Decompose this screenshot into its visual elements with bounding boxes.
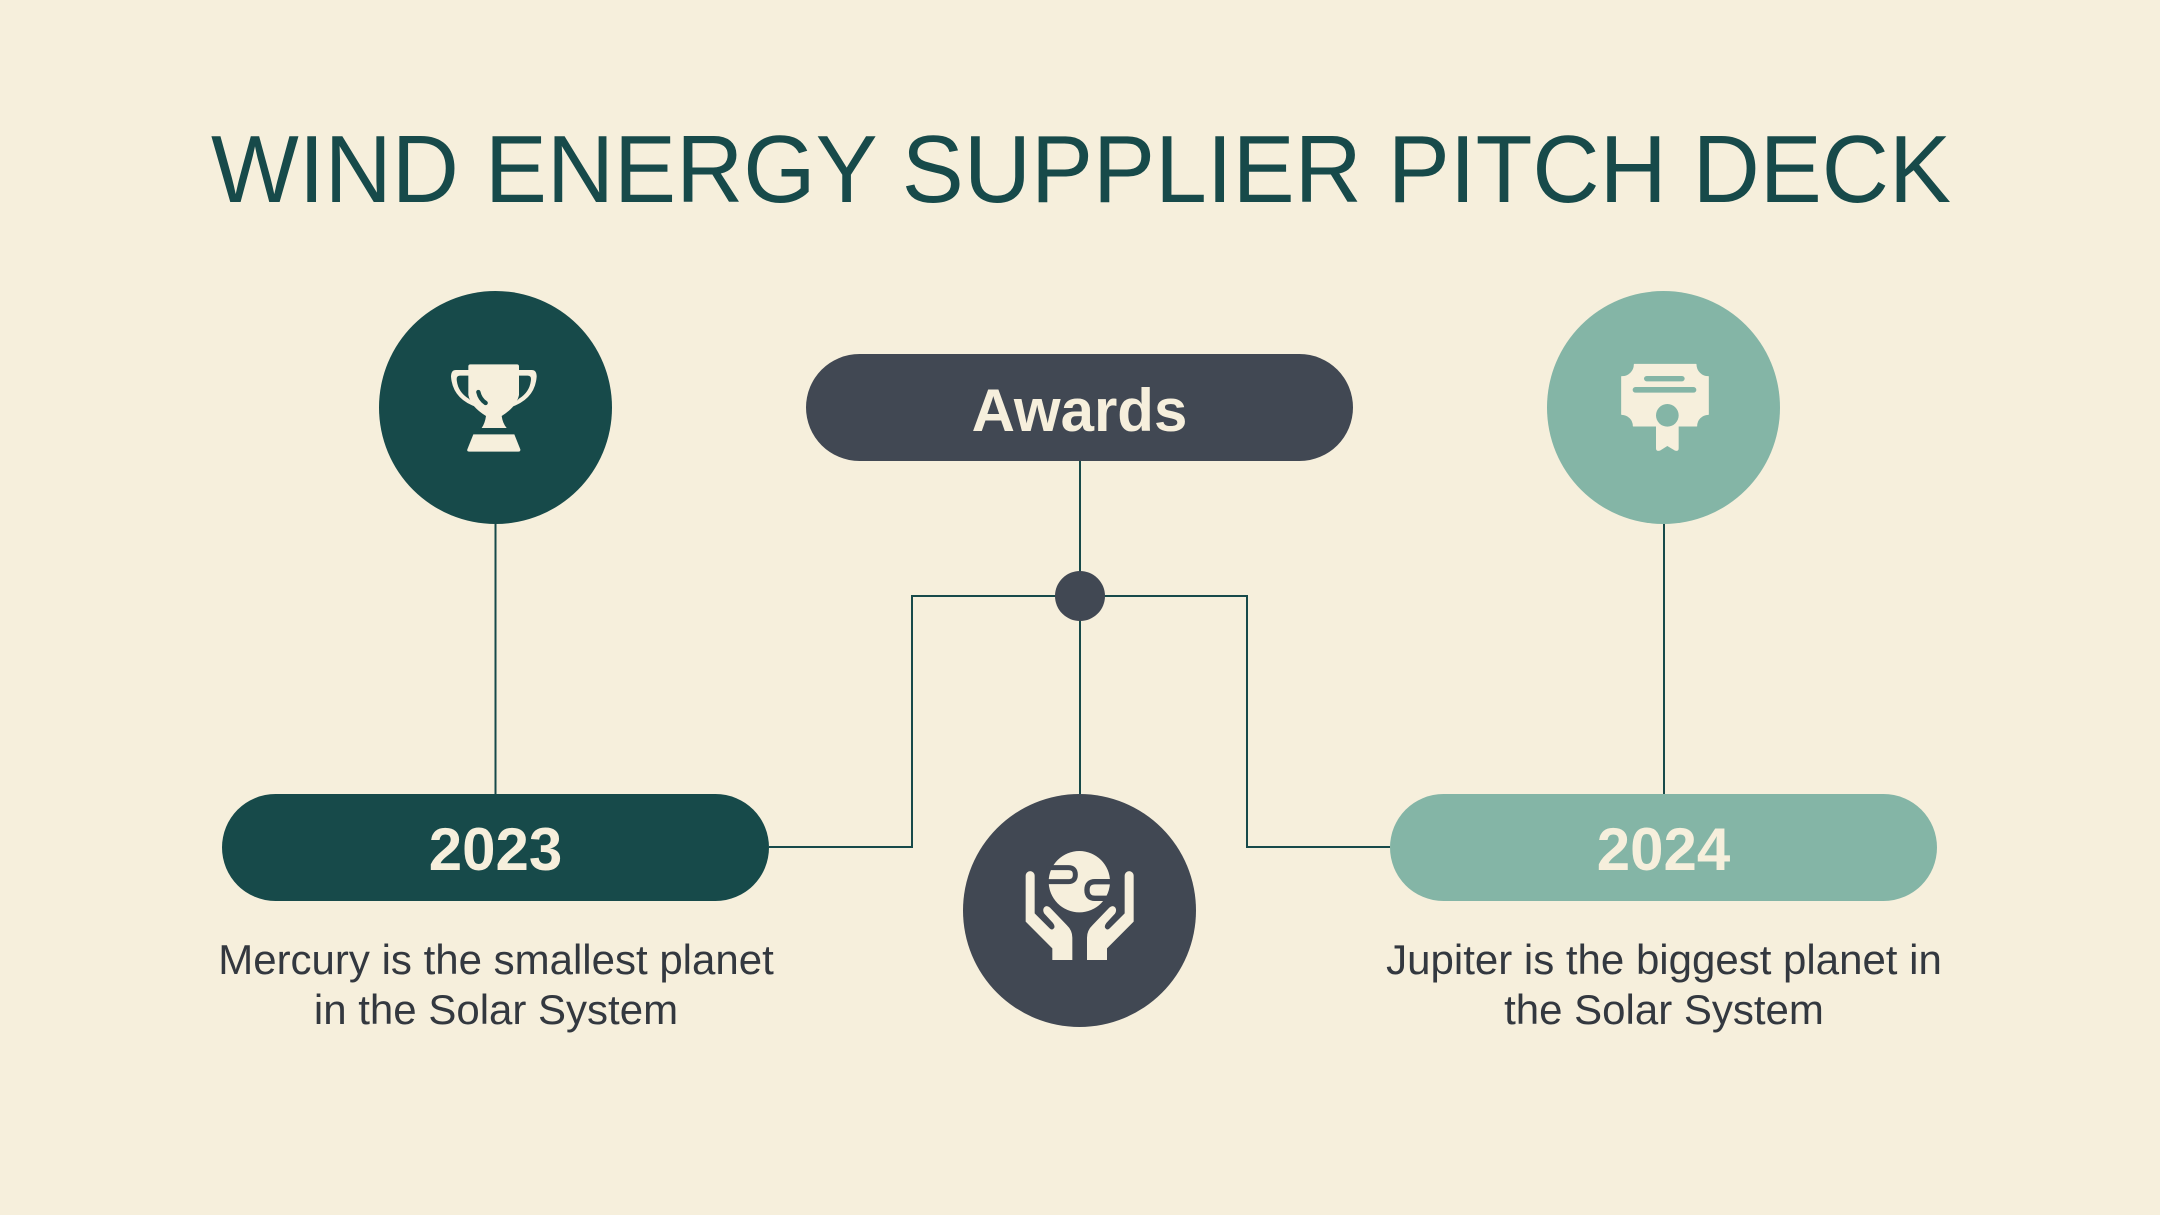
panel: central hands circle: [963, 794, 1196, 1027]
panel: 2024 pill: 2024: [1597, 816, 1731, 883]
central awards pill: Awards: [972, 377, 1187, 444]
text block: Mercury description: [218, 936, 774, 1033]
text block: Mercury description: Mercury is the smallest planet: [218, 936, 774, 983]
panel: 2024 certificate circle: [1547, 291, 1780, 524]
icon: certificate: [1622, 364, 1708, 451]
icon: hands holding globe: [1026, 851, 1134, 960]
text block: Jupiter description: Jupiter is the biggest planet in: [1386, 936, 1942, 983]
text block: Jupiter description: the Solar System: [1504, 986, 1824, 1033]
text block: Jupiter description: [1386, 936, 1942, 1033]
panel: 2024 pill: [1390, 794, 1937, 901]
panel: 2023 trophy circle: [379, 291, 612, 524]
panel: 2023 pill: [222, 794, 769, 901]
icon: trophy: [451, 364, 537, 452]
central awards pill: [806, 354, 1353, 461]
panel: 2023 pill: 2023: [429, 816, 562, 883]
connector lines: [496, 461, 1664, 847]
title: WIND ENERGY SUPPLIER PITCH DECK: [211, 116, 1951, 223]
connector hub dot: [1055, 571, 1105, 621]
text block: Mercury description: in the Solar System: [314, 986, 678, 1033]
